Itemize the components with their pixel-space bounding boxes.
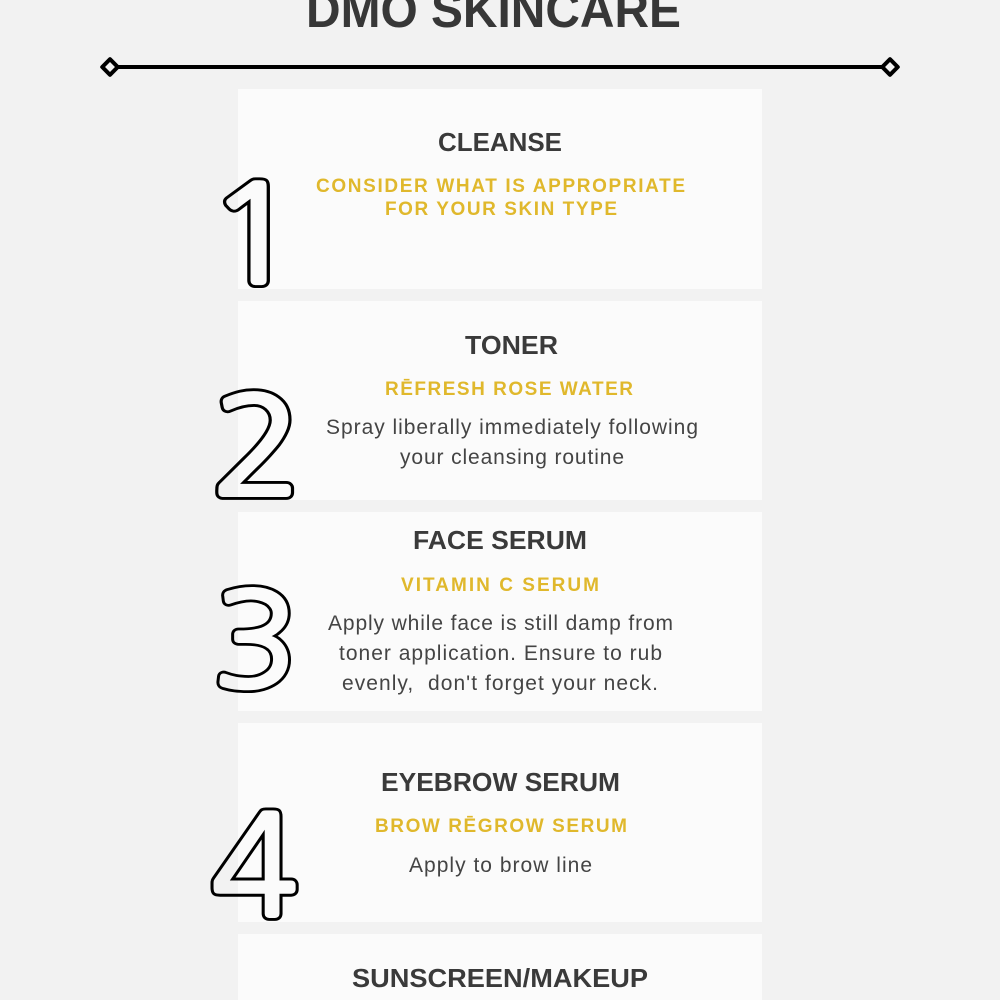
heading: sunscreen/makeup: SUNSCREEN/MAKEUP <box>352 963 648 993</box>
subheading: vitamin c serum: VITAMIN C SERUM <box>401 575 599 596</box>
title divider with diamonds <box>102 59 898 75</box>
body: serum line 1: Apply while face is still damp from <box>328 612 673 635</box>
heading: cleanse: CLEANSE <box>438 127 562 157</box>
body: serum line 2: toner application. Ensure to rub <box>339 642 662 665</box>
body: toner line 2: your cleansing routine <box>400 446 624 469</box>
subheading: brow regrow serum: BROW RĒGROW SERUM <box>375 816 627 837</box>
number 2 outline <box>215 388 294 500</box>
panel: sunscreen/makeup <box>238 934 762 1000</box>
heading: toner: TONER <box>465 330 558 360</box>
subheading: cleanse instruction line 2: FOR YOUR SKIN TYPE <box>385 199 617 220</box>
heading: face serum: FACE SERUM <box>413 525 587 555</box>
panel: eyebrow serum <box>238 723 762 922</box>
body: serum line 3: evenly, don't forget your neck. <box>342 672 658 695</box>
subheading: cleanse instruction: CONSIDER WHAT IS APPROPRIATE <box>316 176 685 197</box>
heading: eyebrow serum: EYEBROW SERUM <box>381 767 620 797</box>
number 4 outline <box>210 808 299 921</box>
body: toner line 1: Spray liberally immediately following <box>326 416 698 439</box>
panel: cleanse <box>238 89 762 289</box>
subheading: refresh rose water: RĒFRESH ROSE WATER <box>385 379 633 400</box>
panel: toner <box>238 301 762 500</box>
number 1 outline <box>222 177 270 288</box>
number 3 outline <box>216 584 291 693</box>
body: eyebrow: Apply to brow line <box>409 854 592 877</box>
panel: face serum <box>238 512 762 711</box>
